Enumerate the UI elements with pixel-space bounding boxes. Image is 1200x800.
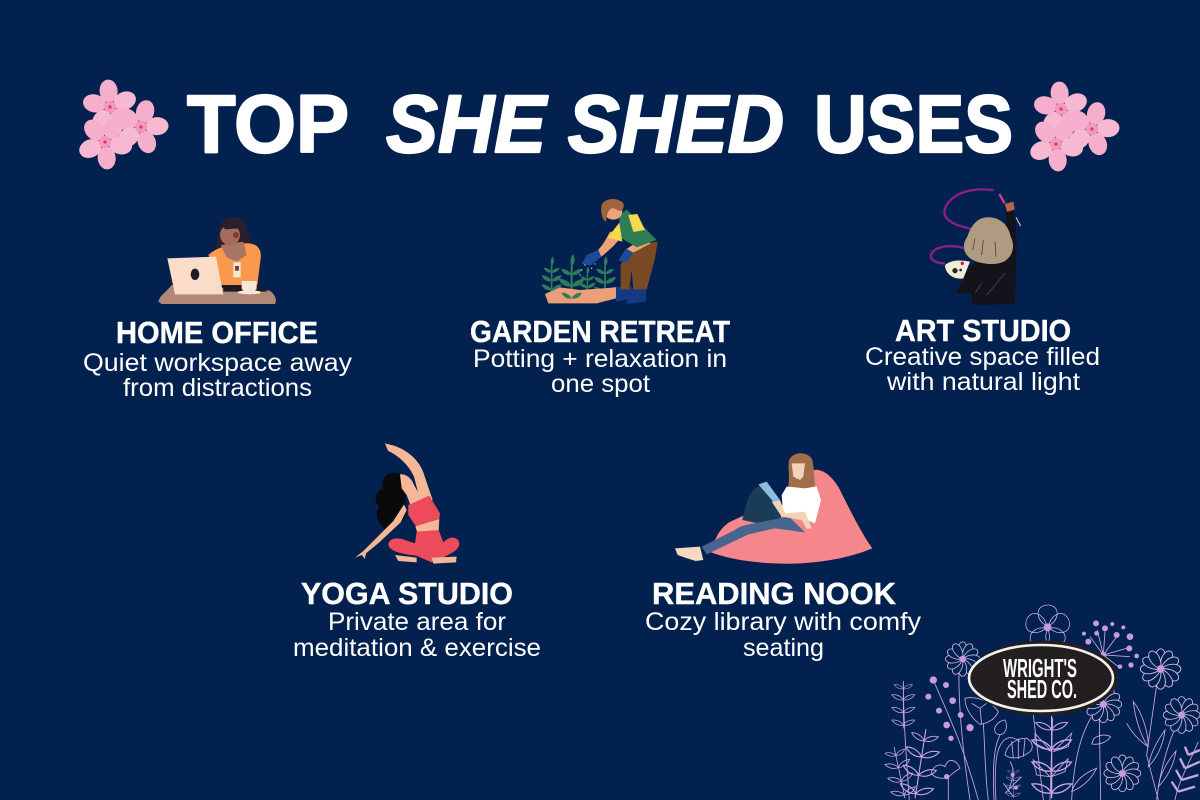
description: with natural light	[886, 368, 1080, 396]
description: meditation & exercise	[293, 634, 541, 662]
panel: reading nook	[645, 453, 922, 662]
heading: HOME OFFICE	[116, 315, 318, 350]
description	[865, 343, 1100, 396]
title: SHE SHED	[386, 79, 784, 170]
heading: ART STUDIO	[895, 313, 1071, 348]
icon: gardener with plants	[542, 199, 658, 304]
icon: woman in yoga stretch	[355, 443, 459, 564]
panel: home office	[83, 217, 353, 402]
icon: woman at laptop	[158, 217, 276, 304]
title: TOP	[187, 79, 349, 170]
description	[473, 345, 727, 398]
icon: left blossom cluster	[66, 77, 176, 180]
panel: garden retreat	[470, 199, 730, 398]
icon: woman reading on beanbag	[675, 453, 872, 564]
title	[187, 79, 1013, 170]
description: from distractions	[123, 374, 312, 402]
description: Potting + relaxation in	[473, 345, 727, 373]
description: Creative space filled	[865, 343, 1100, 371]
heading: READING NOOK	[652, 576, 897, 611]
description	[83, 349, 353, 402]
logo: Wright's Shed Co.: WRIGHT'S	[1003, 653, 1077, 683]
logo: Wright's Shed Co.: SHED CO.	[1007, 674, 1077, 704]
description: one spot	[551, 370, 650, 398]
heading: GARDEN RETREAT	[470, 314, 730, 349]
title: USES	[814, 79, 1013, 170]
heading: YOGA STUDIO	[301, 576, 513, 611]
description	[645, 608, 922, 662]
description: Quiet workspace away	[83, 349, 353, 377]
description	[293, 608, 541, 662]
logo: Wright's Shed Co.	[968, 640, 1118, 716]
description: Private area for	[328, 608, 506, 636]
description: Cozy library with comfy	[645, 608, 922, 636]
panel: art studio	[865, 189, 1100, 396]
icon: right blossom cluster	[1017, 79, 1127, 182]
icon: painter seen from behind	[931, 189, 1021, 305]
wildflower illustration	[882, 605, 1200, 800]
description: seating	[743, 634, 824, 662]
panel: yoga studio	[293, 443, 541, 662]
